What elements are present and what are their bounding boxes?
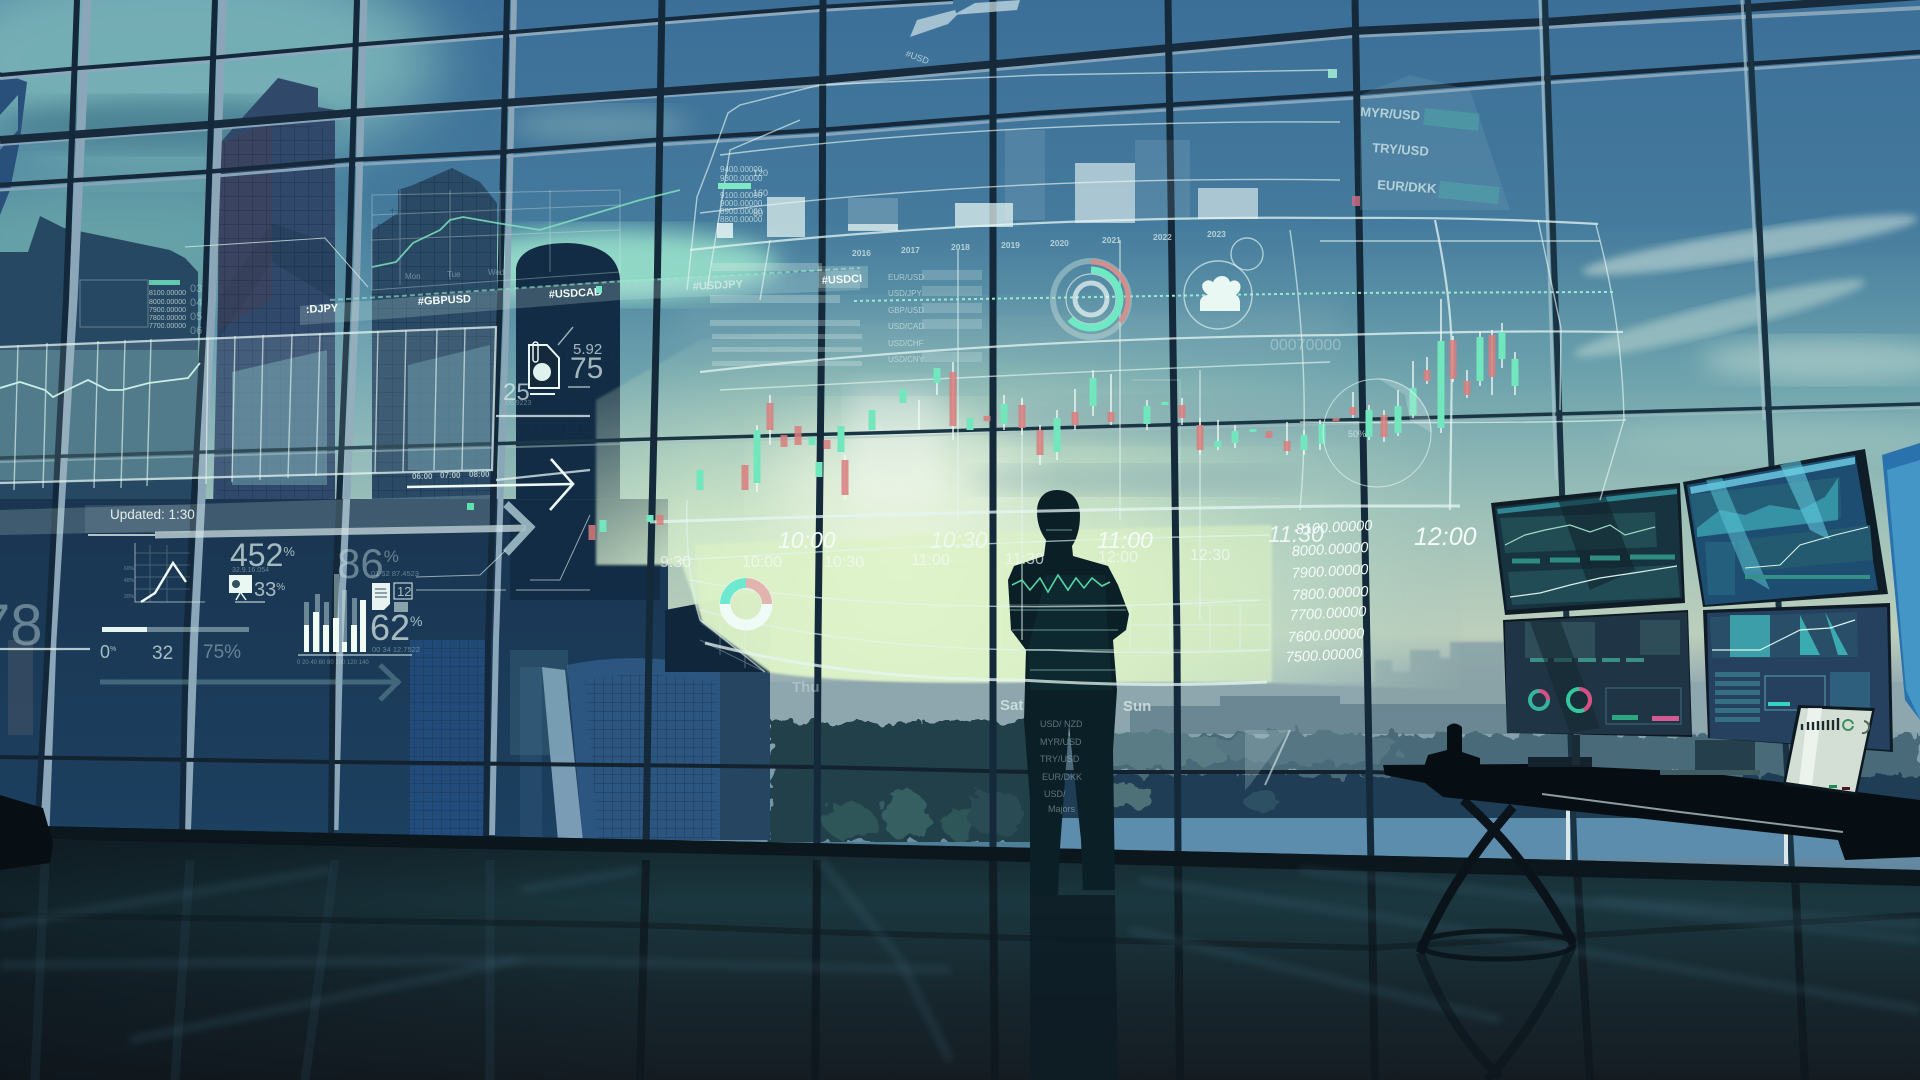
value axis and list: 8800.00000 — [720, 215, 763, 224]
updated band — [0, 495, 490, 535]
candlestick bodies: green — [603, 332, 1515, 532]
ghost tower with pair labels — [1360, 75, 1510, 210]
time labels large: 12:00 — [1414, 523, 1477, 551]
stat 86 percent: % — [384, 547, 399, 566]
tower: grid cylinder — [567, 658, 720, 840]
lighter reflective facades — [232, 350, 327, 485]
holographic display: #USD — [904, 48, 931, 66]
ticker band: #USDCAD — [549, 286, 602, 301]
value axis and list: 9000.00000 — [720, 199, 763, 208]
large arrow — [88, 504, 530, 553]
base of tower cluster — [0, 500, 668, 840]
monitor: far right side screen — [1882, 443, 1920, 720]
reflected currency text on legs: Majors — [1048, 804, 1076, 814]
upper green line chart — [372, 190, 680, 290]
small upper-left grid with values: 7900.00000 — [149, 307, 186, 314]
monitor: bottom left gauges screen — [1503, 610, 1692, 737]
ticker band: #GBPUSD — [418, 293, 471, 308]
facade grid overlay — [218, 120, 497, 500]
faint reflected shape near river — [1245, 730, 1290, 790]
monitor: bottom right chart screen — [1703, 603, 1893, 752]
time axis labels: 07:00 — [440, 471, 461, 480]
shadowy chair at left edge — [0, 795, 53, 870]
top right chevrons — [910, 0, 1020, 37]
currency pairs table: USD/CAD — [888, 322, 924, 331]
year labels: 2019 — [1001, 240, 1020, 250]
year labels: 2023 — [1207, 229, 1226, 239]
value axis and list: 160 — [753, 188, 768, 198]
value axis and list: 120 — [753, 168, 768, 178]
time labels small: 10:00 — [742, 554, 782, 571]
time axis labels: 06:00 — [412, 472, 433, 481]
joystick on desk — [1423, 724, 1480, 770]
donut chart — [1053, 261, 1129, 337]
reflected currency text on legs: EUR/DKK — [1042, 772, 1082, 782]
pink marker — [1352, 196, 1360, 206]
ticker band — [300, 266, 868, 325]
green marker top right — [1328, 69, 1337, 78]
value axis and list: 9300.00000 — [720, 174, 763, 183]
price axis: 8100.00000 — [1295, 518, 1373, 538]
small upper-left grid with values: 05 — [190, 311, 202, 323]
monitor: top left chart screen — [1491, 483, 1685, 615]
day labels: Thu — [792, 679, 820, 696]
small upper-left grid with values: 03 — [190, 283, 202, 295]
time labels small: 10:30 — [824, 554, 864, 571]
stat 33 percent: % — [276, 582, 285, 593]
document pie icon with values: 25 — [503, 379, 530, 406]
value axis and list: 80 — [753, 208, 763, 218]
time axis labels: 08:00 — [469, 470, 490, 479]
value axis and list: 9400.00000 — [720, 165, 763, 174]
currency pairs table: USD/CNY — [888, 355, 925, 364]
currency pairs table: GBP/USD — [888, 306, 924, 315]
time labels small: 11:30 — [1005, 551, 1044, 568]
time labels small: 12:00 — [1098, 549, 1138, 566]
silhouette: man standing — [1008, 490, 1129, 1080]
circular percent gauge: 50% — [1348, 429, 1366, 439]
holographic display — [592, 0, 1626, 790]
time axis labels — [412, 470, 490, 481]
background year bars — [717, 130, 1258, 238]
small upper-left grid with values: 06 — [190, 325, 202, 337]
left data wall — [0, 190, 868, 755]
small upper-left grid with values: 8100.00000 — [149, 290, 186, 297]
value axis and list — [718, 165, 768, 224]
panel outline curves — [650, 70, 1626, 685]
progress bar with labels: 0 — [100, 642, 110, 662]
tower: stepped — [372, 168, 497, 840]
small dark grid under the donut — [700, 620, 770, 672]
document and counter icons — [372, 583, 412, 612]
candlestick bodies: red — [592, 335, 1492, 540]
time labels large: 10:00 — [778, 527, 836, 553]
desk device — [1528, 757, 1592, 767]
small line chart: 40% — [124, 578, 135, 584]
dotted value line — [854, 292, 1615, 301]
stat 33 percent: 33 — [254, 579, 276, 601]
ghost tower with pair labels: EUR/DKK — [1377, 177, 1438, 196]
ghost arrow lower left — [100, 665, 400, 700]
circular percent gauge — [1323, 378, 1432, 487]
small upper-left grid with values: 04 — [190, 297, 202, 309]
year labels: 2016 — [852, 248, 871, 258]
people icon in circles — [1184, 238, 1263, 329]
price axis: 7800.00000 — [1291, 584, 1369, 604]
presentation board icon — [229, 575, 252, 600]
connector line — [185, 238, 368, 287]
tower: left low building — [0, 216, 198, 840]
price axis: 7900.00000 — [1291, 562, 1369, 582]
progress bar with labels: % — [110, 646, 116, 653]
currency pairs table: USD/CHF — [888, 339, 924, 348]
day labels: Sun — [1123, 698, 1151, 715]
stat 452 percent: % — [283, 544, 295, 559]
small upper-left grid with values — [80, 280, 202, 337]
value axis and list: 8900.00000 — [720, 207, 763, 216]
man body — [1008, 490, 1129, 895]
upper green line chart: Tue — [447, 270, 461, 279]
near and far tree masses — [770, 722, 1920, 845]
small line chart: 20% — [124, 594, 135, 600]
document pie icon with values — [503, 327, 603, 407]
time labels large: 11:30 — [1268, 521, 1324, 547]
ghost tower with pair labels: MYR/USD — [1360, 104, 1421, 123]
thin white arrow — [407, 459, 573, 510]
laptop on desk — [1783, 705, 1875, 795]
currency pairs table: USD/JPY — [888, 289, 922, 298]
ticker band: :DJPY — [306, 302, 339, 316]
left data wall: 00 34 12.7522 — [372, 645, 420, 654]
price axis: 7700.00000 — [1289, 604, 1367, 624]
progress bar with labels — [0, 627, 249, 664]
monitor: top right chart screen — [1683, 449, 1888, 607]
distant landscape: skyline, trees and river — [770, 642, 1920, 858]
time labels large: 11:00 — [1097, 527, 1153, 553]
time labels small: 12:30 — [1190, 547, 1230, 564]
trading desk — [1383, 724, 1920, 1080]
left data wall: 32.9.16.054 — [232, 567, 269, 574]
currency pairs table — [888, 270, 982, 364]
desk legs and base — [1420, 800, 1574, 1080]
small upper-left grid with values: 7800.00000 — [149, 315, 186, 322]
year labels: 2021 — [1102, 235, 1121, 245]
year labels: 2022 — [1153, 232, 1172, 242]
upper green line chart: Mon — [405, 272, 421, 281]
left grid panel with line chart — [0, 327, 496, 490]
year labels: 2020 — [1050, 238, 1069, 248]
ticker band: #USDJPY — [693, 278, 744, 293]
day labels: Sat — [1000, 697, 1023, 714]
monitor stands — [1572, 735, 1760, 775]
tower: central dark — [205, 78, 335, 840]
document pie icon with values: 75 — [570, 352, 603, 385]
bar chart: 0 20 40 60 80 100 120 140 — [297, 660, 369, 666]
horizontal lines across the man — [1010, 530, 1126, 670]
year labels — [852, 229, 1226, 258]
time labels small: 11:00 — [911, 552, 950, 569]
buttons — [1612, 715, 1679, 721]
small upper-left grid with values: 7700.00000 — [149, 323, 186, 330]
small donut chart — [725, 583, 767, 625]
reflected currency text on legs: USD/ — [1044, 789, 1066, 799]
desk top — [1383, 764, 1920, 860]
bar chart — [297, 574, 412, 666]
left data wall: 01 52 87.4523 — [371, 569, 419, 578]
price axis: 7600.00000 — [1287, 626, 1365, 646]
ECG line across the torso — [1012, 575, 1110, 592]
small line chart — [124, 543, 205, 602]
tower: striped corner — [520, 667, 542, 840]
stat 62 percent: 62 — [370, 607, 410, 648]
ghost tower with pair labels: TRY/USD — [1372, 140, 1429, 159]
year labels: 2017 — [901, 245, 920, 255]
document pie icon with values: 5.92 — [573, 341, 602, 358]
gauge rings — [1530, 689, 1590, 711]
faded numbers: 00070000 — [1270, 337, 1341, 354]
leader lines — [416, 515, 590, 590]
price axis: 7500.00000 — [1285, 646, 1363, 666]
price axis: 8000.00000 — [1291, 540, 1369, 560]
city towers — [0, 72, 770, 840]
price axis — [1285, 518, 1373, 666]
candlestick wicks — [757, 299, 1515, 500]
floor with reflections — [0, 826, 1920, 1080]
reflected currency text on legs: USD/ NZD — [1040, 719, 1083, 729]
small line chart: 60% — [124, 566, 135, 572]
tower: dark cylinder — [516, 243, 620, 840]
stat 62 percent: % — [410, 613, 422, 629]
progress bar with labels: 75% — [203, 642, 241, 663]
reflected currency text on legs: TRY/USD — [1040, 754, 1080, 764]
frame structure upper left — [0, 72, 27, 215]
day labels — [792, 679, 1151, 715]
document and counter icons: 12 — [397, 584, 411, 599]
time labels small — [660, 547, 1230, 571]
year labels: 2018 — [951, 242, 970, 252]
stat 452 percent: 452 — [230, 537, 283, 573]
ticker band: #USDCI — [822, 273, 862, 287]
progress bar with labels: 32 — [152, 643, 173, 664]
bright glow behind the holographic display — [596, 300, 1460, 690]
updated band: Updated: 1:30 — [110, 507, 195, 522]
divider lines — [496, 416, 590, 480]
time labels large: 10:30 — [930, 527, 988, 553]
upper green line chart: Wed — [488, 268, 504, 277]
reflected currency text on legs: MYR/USD — [1040, 737, 1082, 747]
small upper-left grid with values: 8000.00000 — [149, 299, 186, 306]
value axis and list: 9100.00000 — [720, 191, 763, 200]
desk edge highlight — [1542, 794, 1843, 832]
time labels small: 9:30 — [660, 554, 691, 571]
time labels large — [778, 521, 1477, 553]
reflection of man — [1030, 895, 1118, 1080]
reflected currency text on legs — [1040, 719, 1083, 814]
faded table — [510, 650, 568, 755]
currency pairs table: EUR/USD — [888, 273, 924, 282]
striped data rows — [710, 263, 862, 366]
document pie icon with values: 05.9223 — [506, 400, 531, 407]
stat 86 percent: 86 — [337, 540, 384, 587]
